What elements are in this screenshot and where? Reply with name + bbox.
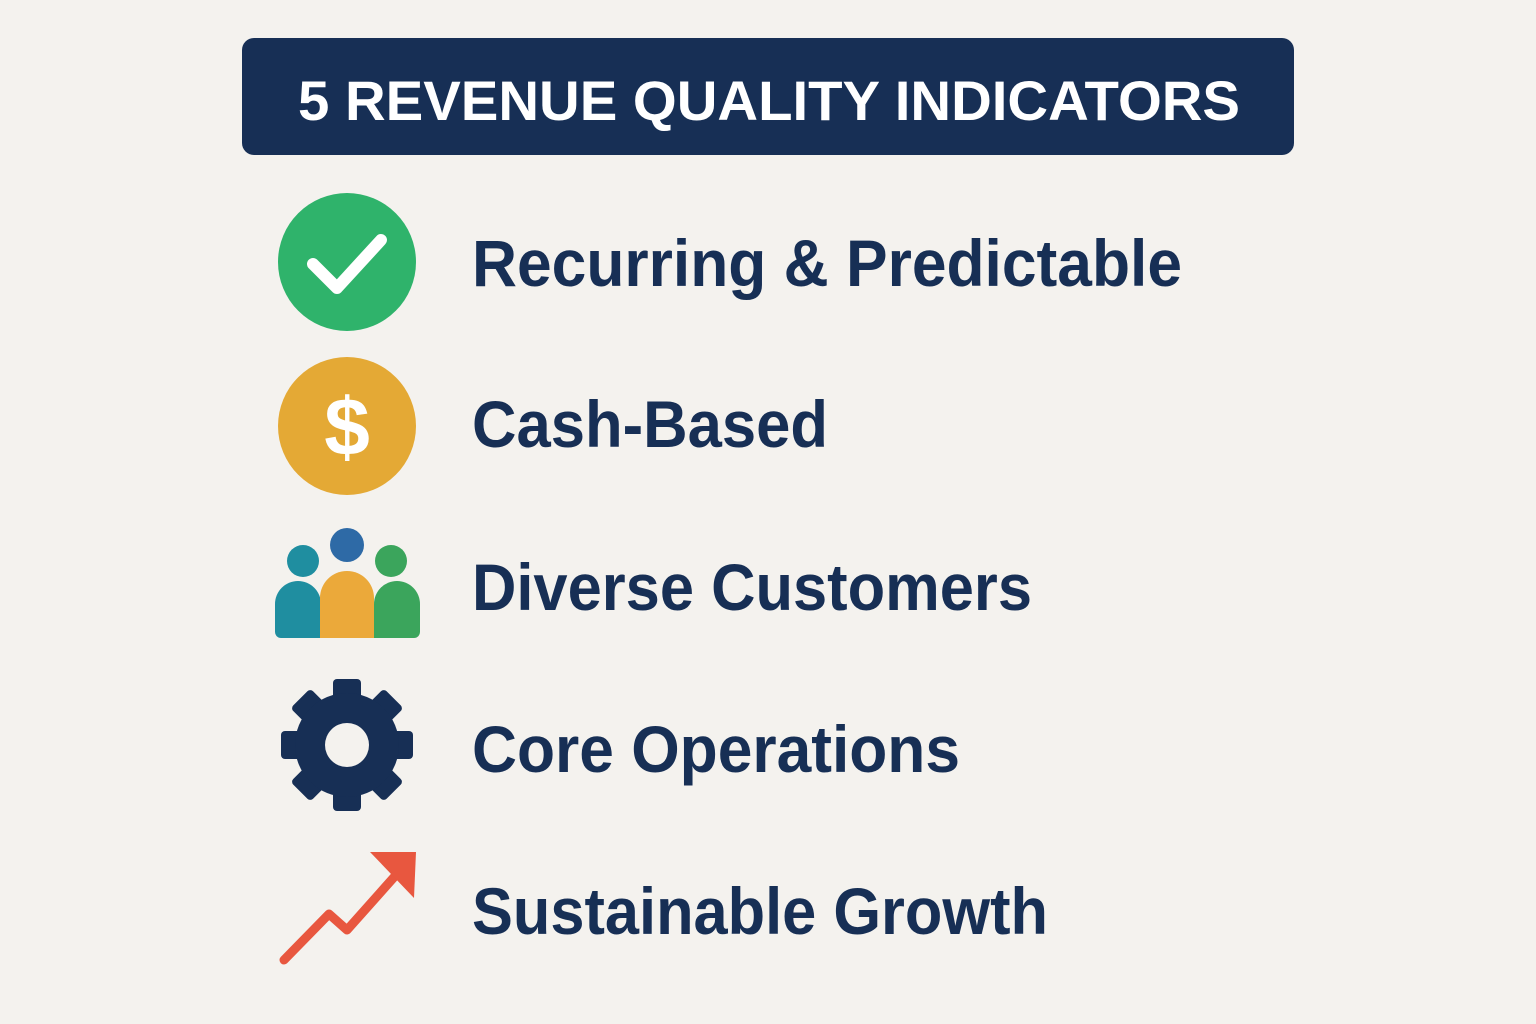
title: 5 REVENUE QUALITY INDICATORS xyxy=(298,69,1240,132)
icon: check circle xyxy=(278,193,416,331)
icon: dollar coin: $ xyxy=(324,382,370,473)
title xyxy=(242,38,1294,155)
row: recurring xyxy=(278,193,1182,331)
icon: gear xyxy=(281,679,413,811)
label: growth: Sustainable Growth xyxy=(472,874,1048,948)
label: cash: Cash-Based xyxy=(472,387,828,461)
icon: dollar coin xyxy=(278,357,416,495)
label: recurring: Recurring & Predictable xyxy=(472,226,1182,300)
row: customers xyxy=(275,528,1032,638)
row: core xyxy=(281,679,960,811)
icon: people xyxy=(275,528,420,638)
row: growth xyxy=(284,852,1048,960)
label: customers: Diverse Customers xyxy=(472,550,1032,624)
icon: growth arrow xyxy=(284,852,416,960)
label: core: Core Operations xyxy=(472,712,960,786)
row: cash xyxy=(278,357,828,495)
